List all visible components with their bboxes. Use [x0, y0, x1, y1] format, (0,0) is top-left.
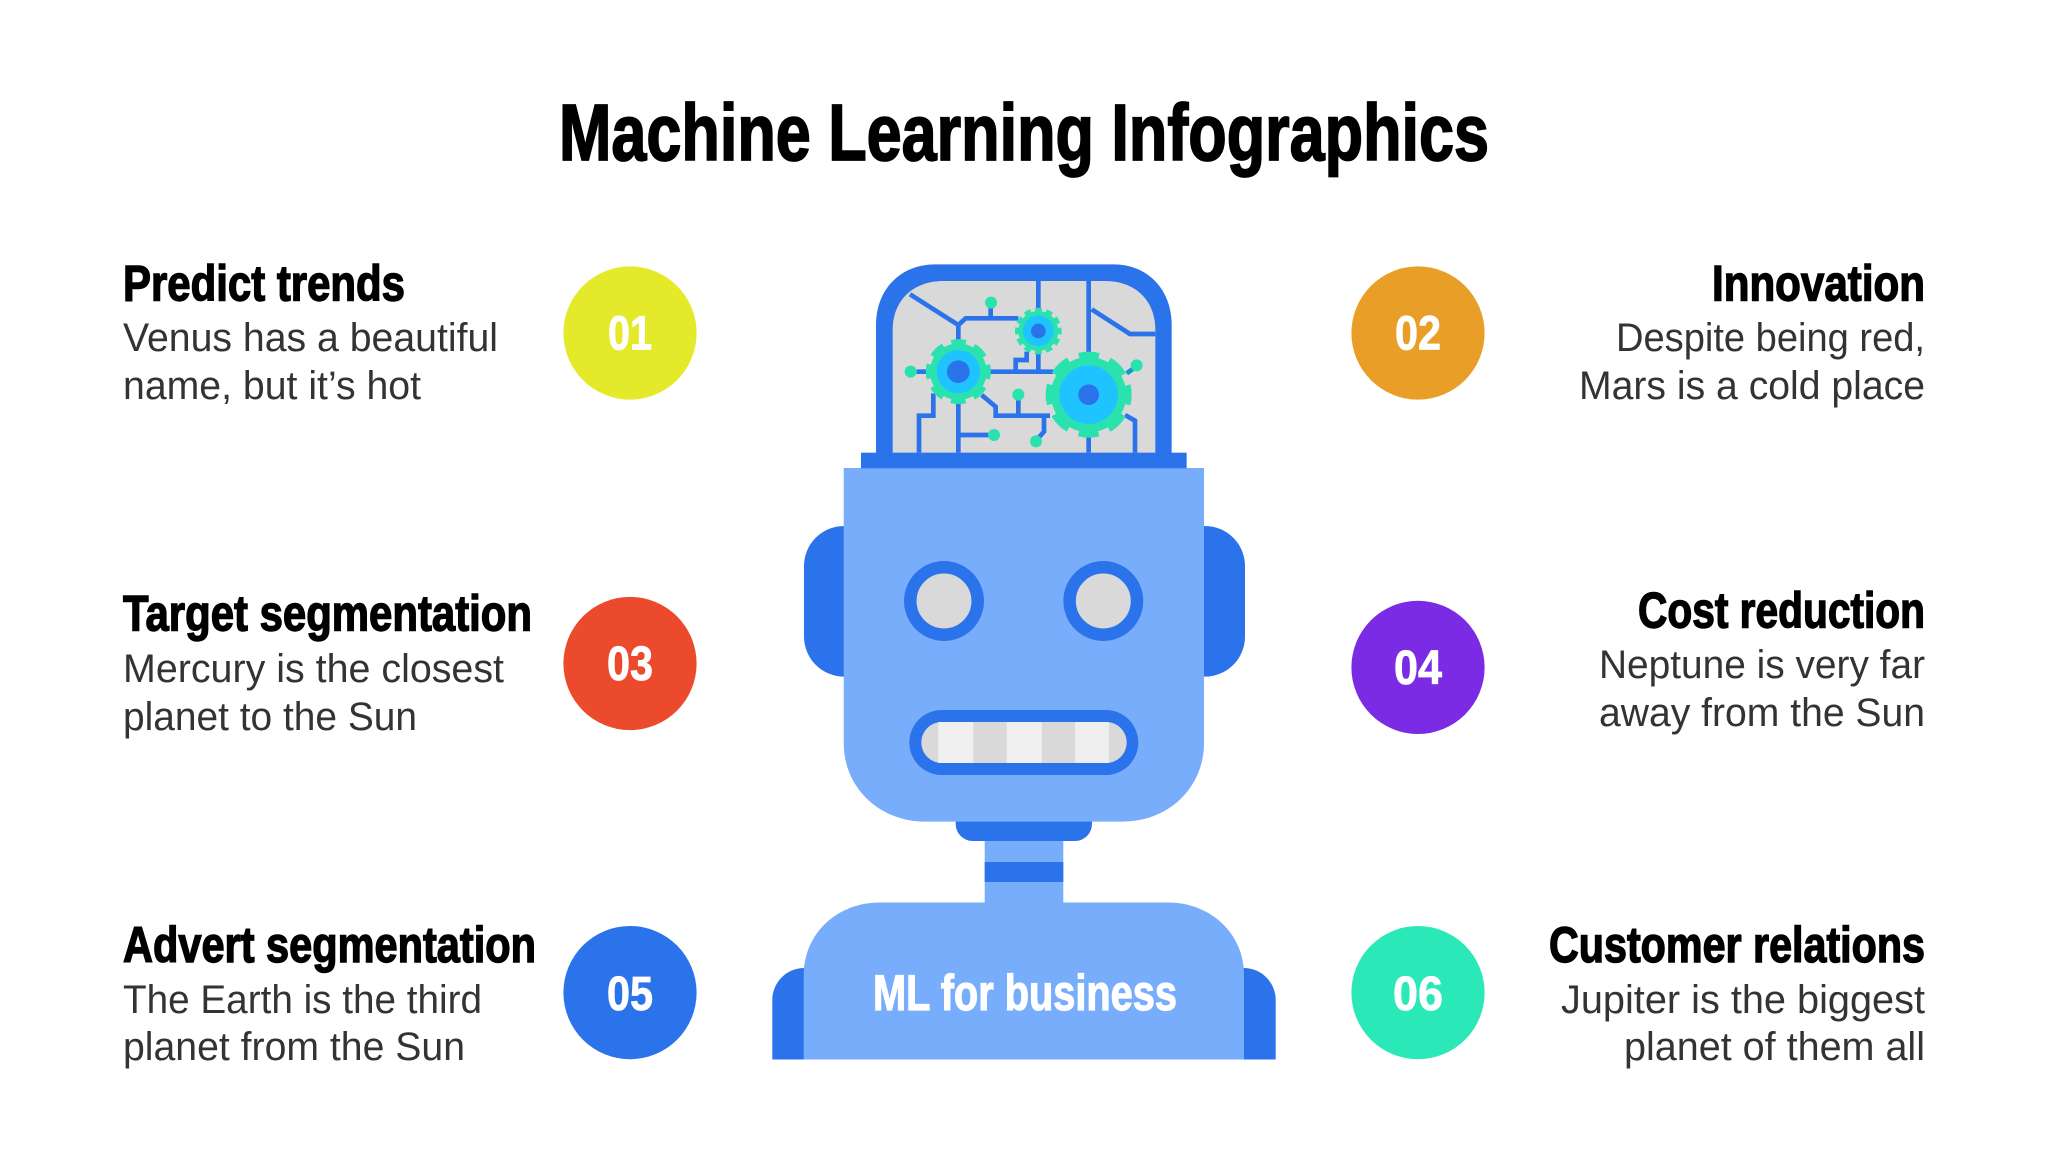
brain dome [861, 264, 1187, 468]
panel: target segmentation [123, 586, 697, 739]
panel: customer relations [1351, 917, 1925, 1069]
badge 06: 06 [1393, 968, 1443, 1021]
text block: predict trends [123, 316, 498, 408]
text block: advert segmentation [123, 978, 482, 1069]
robot shoulders [772, 968, 1276, 1060]
heading: predict trends: Predict trends [123, 256, 405, 312]
robot head [844, 468, 1204, 822]
text block: customer relations [1561, 978, 1925, 1069]
badge 02: 02 [1395, 308, 1441, 360]
robot body [804, 902, 1244, 1060]
mouth [909, 710, 1138, 775]
robot label: ML for business [873, 965, 1177, 1021]
heading: innovation: Innovation [1712, 256, 1925, 312]
text block: target segmentation: planet to the Sun [123, 695, 417, 739]
gear small [1018, 311, 1058, 351]
badge 05 [563, 926, 697, 1059]
panel: advert segmentation [123, 917, 697, 1069]
badge 01: 01 [608, 308, 652, 360]
right eye [1070, 567, 1137, 635]
heading: target segmentation: Target segmentation [123, 586, 532, 642]
circuit nodes [905, 297, 1143, 447]
text block: advert segmentation: The Earth is the third [123, 978, 482, 1022]
circuit lines [910, 281, 1155, 453]
badge 03: 03 [607, 638, 653, 691]
dome base [861, 453, 1187, 468]
robot illustration [772, 264, 1276, 1060]
text block: cost reduction: away from the Sun [1599, 691, 1925, 735]
text block: customer relations: Jupiter is the biggest [1561, 978, 1925, 1022]
heading: customer relations: Customer relations [1549, 917, 1925, 973]
heading: advert segmentation: Advert segmentation [123, 917, 536, 973]
text block: cost reduction: Neptune is very far [1599, 643, 1925, 687]
text block: advert segmentation: planet from the Sun [123, 1025, 465, 1069]
neck collar [956, 820, 1092, 841]
badge 02 [1351, 266, 1485, 400]
badge 05: 05 [607, 968, 653, 1021]
badge 01 [563, 266, 697, 400]
text block: innovation [1579, 316, 1925, 408]
robot neck [985, 838, 1063, 904]
panel: predict trends [123, 256, 697, 408]
badge 06 [1351, 926, 1485, 1059]
text block: customer relations: planet of them all [1624, 1025, 1925, 1069]
left eye [910, 567, 978, 635]
badge 04: 04 [1394, 642, 1442, 695]
heading: cost reduction: Cost reduction [1638, 582, 1925, 638]
text block: innovation: Mars is a cold place [1579, 364, 1925, 408]
text block: target segmentation: Mercury is the closest [123, 647, 504, 691]
text block: predict trends: Venus has a beautiful [123, 316, 498, 360]
text block: cost reduction [1599, 643, 1925, 735]
title: Machine Learning Infographics [559, 88, 1489, 177]
panel: innovation [1351, 256, 1925, 408]
text block: innovation: Despite being red, [1616, 316, 1925, 360]
text block: predict trends: name, but it’s hot [123, 364, 421, 408]
left ear [804, 526, 846, 677]
panel: cost reduction [1351, 582, 1925, 735]
gear left [930, 343, 987, 400]
right ear [1202, 526, 1245, 677]
text block: target segmentation [123, 647, 504, 739]
badge 04 [1351, 601, 1485, 734]
gear large [1050, 356, 1127, 433]
badge 03 [563, 597, 697, 730]
